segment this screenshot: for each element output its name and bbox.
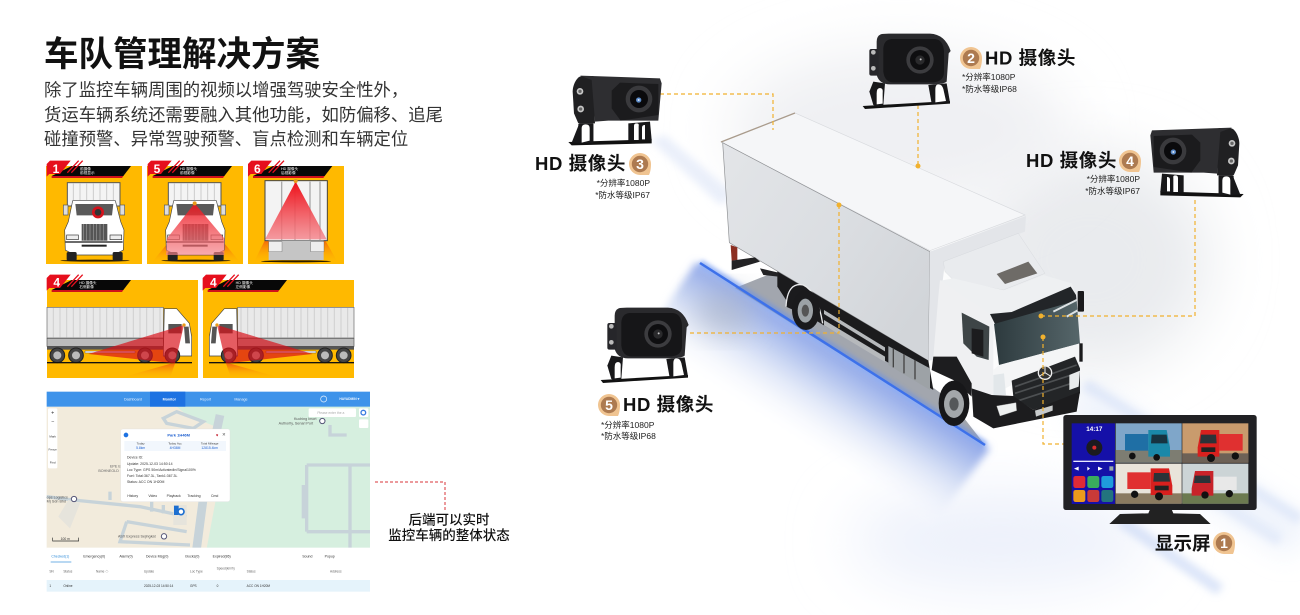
alert table: Name ◇ (96, 569, 109, 574)
truck: front wheel (939, 381, 969, 426)
thumbnail 1: 前视显示 (80, 170, 95, 175)
vehicle info popup (121, 429, 230, 502)
label: camera 2: HD 摄像头 (985, 48, 1076, 68)
map base: EPE E (110, 465, 121, 469)
label: display: 显示屏 (1155, 533, 1211, 554)
map controls: Please enter the a (317, 411, 344, 415)
label: camera 2: *分辨率1080P (962, 72, 1016, 82)
vehicle info popup: ♥ (216, 432, 219, 437)
vehicle info popup: Park 1H46M (167, 433, 191, 438)
map controls: Fence (49, 448, 57, 452)
vehicle info popup: Status: ACC ON 1H20M (127, 480, 164, 484)
truck: rear wheel (786, 285, 823, 330)
label: display (1155, 532, 1235, 554)
alert table: 2025-12-03 14:50:14 (144, 584, 174, 588)
truck: windshield (994, 301, 1080, 365)
thumbnail 4 right-facing: 右侧影像 (79, 284, 94, 289)
vehicle info popup: Tracking (187, 494, 201, 498)
label: camera 4: 4 (1126, 153, 1134, 169)
thumbnail 6: 6 (254, 162, 261, 176)
top navigation bar (47, 392, 370, 407)
map base: Kuching Imort (294, 417, 317, 421)
truck: cargo box top (721, 113, 1025, 251)
map base: 100 m (61, 537, 70, 541)
truck: roof panel (997, 262, 1037, 284)
alert table: Expired(86) (213, 554, 231, 558)
panel: fleet monitoring map (47, 392, 370, 592)
gray road under truck (735, 272, 985, 445)
alert table: Loc Type (190, 570, 203, 574)
map controls: + (51, 410, 54, 416)
alert table: Status (247, 570, 256, 574)
vehicle info popup: Device ID: (127, 456, 143, 460)
vehicle info popup: History (127, 494, 138, 498)
alert table: GPS (190, 584, 197, 588)
vehicle info popup: Fuel: Total:367.3L, Tank1:367.3L (127, 474, 177, 478)
vehicle info popup: 5.8km (136, 446, 145, 450)
vehicle info popup: Today (137, 441, 145, 445)
map base: ASX Express Sejingkat (118, 535, 156, 539)
monitor: camera feeds (1116, 423, 1248, 504)
camera 3 (568, 76, 662, 145)
label: camera 3: 3 (636, 156, 644, 172)
top navigation bar: HAYADMIN ▾ (339, 397, 360, 401)
thumbnail 6: HD 摄像头 (281, 166, 299, 171)
label: camera 4: HD 摄像头 (1026, 150, 1117, 171)
camera 5 (601, 308, 689, 383)
intro text: 碰撞预警、异常驾驶预警、盲点检测和车辆定位 (44, 129, 408, 149)
thumbnail 4 right-facing: HD 摄像头 (79, 280, 97, 285)
label: camera 4 (1026, 150, 1141, 196)
alert table: Address (330, 570, 342, 574)
label: camera 4: *分辨率1080P (1087, 174, 1140, 184)
title: 车队管理解决方案 (44, 36, 320, 74)
thumbnail 6 (248, 161, 344, 264)
thumbnail 5: 5 (154, 162, 161, 176)
top navigation bar: Dashboard (124, 397, 142, 401)
vehicle info popup: ✕ (222, 432, 226, 437)
map callout text: 后端可以实时 (408, 512, 490, 528)
map base: Authority, Senari Port (279, 421, 313, 425)
map base: ops Logistics (47, 496, 68, 500)
vehicle info popup: 12815.4km (201, 446, 218, 450)
thumbnail 4 left-facing: HD 摄像头 (236, 280, 253, 285)
intro text: 货运车辆系统还需要融入其他功能，如防偏移、追尾 (44, 104, 443, 124)
truck: wind deflector (943, 233, 1045, 290)
thumbnail 1: 前摄像 (80, 166, 91, 171)
thumbnail 5: 前视影像 (180, 170, 195, 175)
alert table: Update (144, 570, 154, 574)
label: camera 3: HD 摄像头 (535, 153, 626, 174)
truck: cargo box front (928, 216, 1026, 361)
map controls: Find (50, 461, 56, 465)
monitor display (1063, 415, 1257, 524)
truck illustration (721, 113, 1084, 428)
vehicle info popup: Update: 2025-12-03 14:50:14 (127, 462, 173, 466)
vehicle info popup: Today Acc (168, 441, 182, 445)
label: camera 5 (598, 394, 714, 441)
truck: cargo box side (723, 143, 930, 361)
thumbnail 4 right-facing (47, 275, 198, 378)
alert table: SN (49, 570, 54, 574)
camera 4 (1150, 128, 1244, 197)
top navigation bar: Monitor (163, 397, 177, 401)
label: camera 3: *防水等级IP67 (595, 190, 650, 200)
label: display: 1 (1220, 535, 1228, 551)
alert table: Alarm(0) (119, 554, 133, 558)
thumbnail 1 (46, 161, 142, 264)
thumbnail 1: 1 (53, 162, 60, 176)
alert table: Online (63, 584, 73, 588)
map base (47, 407, 370, 548)
map callout text (388, 512, 510, 543)
vehicle info popup: 4H38M (170, 446, 181, 450)
alert table: blocks(0) (185, 554, 199, 558)
label: camera 4: *防水等级IP67 (1085, 186, 1140, 196)
thumbnail 5: HD 摄像头 (180, 166, 198, 171)
map controls: − (51, 420, 54, 426)
map base: M) Sdn Bhd (47, 500, 66, 504)
alert table: Status (63, 570, 73, 574)
vehicle info popup: Video (148, 494, 157, 498)
panel: ADAS thumbnails (46, 161, 354, 378)
alert table: 0 (217, 584, 219, 588)
truck: cab (932, 233, 1084, 428)
alert table: Popup (325, 554, 335, 558)
truck: rear bumper and chassis (731, 245, 933, 390)
alert table: 1 (49, 584, 51, 588)
label: camera 3: *分辨率1080P (597, 178, 650, 188)
label: camera 5: *分辨率1080P (601, 420, 655, 430)
thumbnail 4 left-facing: 左侧影像 (236, 284, 251, 289)
map controls: Mark (49, 435, 56, 439)
camera 2 (863, 34, 951, 109)
alert table: Device Msg(0) (146, 554, 168, 558)
label: camera 5: 5 (605, 397, 613, 413)
vehicle info popup: Playback (167, 494, 181, 498)
label: camera 2: *防水等级IP68 (962, 84, 1017, 94)
thumbnail 4 left-facing (203, 275, 354, 378)
label: camera 5: *防水等级IP68 (601, 431, 656, 441)
intro text: 除了监控车辆周围的视频以增强驾驶安全性外， (44, 80, 408, 100)
background glow and road streaks (600, 0, 1300, 615)
top navigation bar: Report (200, 397, 211, 401)
alert table: Speed(km/h) (217, 567, 235, 571)
thumbnail 4 right-facing: 4 (53, 276, 60, 290)
label: camera 3 (535, 153, 651, 200)
vehicle info popup: Total Mileage (201, 441, 219, 445)
thumbnail 6: 后视影像 (281, 170, 296, 175)
alert table: Emergency(0) (83, 554, 105, 558)
alert table (47, 548, 370, 592)
connector lines (660, 94, 1195, 444)
monitor: control panel (1072, 423, 1115, 504)
intro text (44, 80, 443, 149)
vehicle info popup: Loc Type: GPS 50m/ActivatedIn/Signal100% (127, 468, 196, 472)
map callout connector (375, 482, 445, 510)
map controls (48, 408, 368, 468)
monitor: control panel: 14:17 (1086, 426, 1103, 433)
vehicle info popup: Cmd (211, 494, 218, 498)
map base: BOHNEOLD (98, 469, 119, 473)
alert table: ACC ON 1H20M (247, 584, 270, 588)
label: camera 2 (960, 47, 1076, 94)
thumbnail 4 left-facing: 4 (210, 276, 217, 290)
connector dots (836, 164, 1046, 340)
alert table: Checked(1) (51, 554, 69, 558)
thumbnail 5 (147, 161, 243, 264)
label: camera 5: HD 摄像头 (623, 394, 714, 415)
label: camera 2: 2 (967, 50, 975, 66)
alert table: Sound (302, 554, 312, 558)
top navigation bar: Manage (234, 397, 248, 401)
map callout text: 监控车辆的整体状态 (388, 527, 510, 543)
